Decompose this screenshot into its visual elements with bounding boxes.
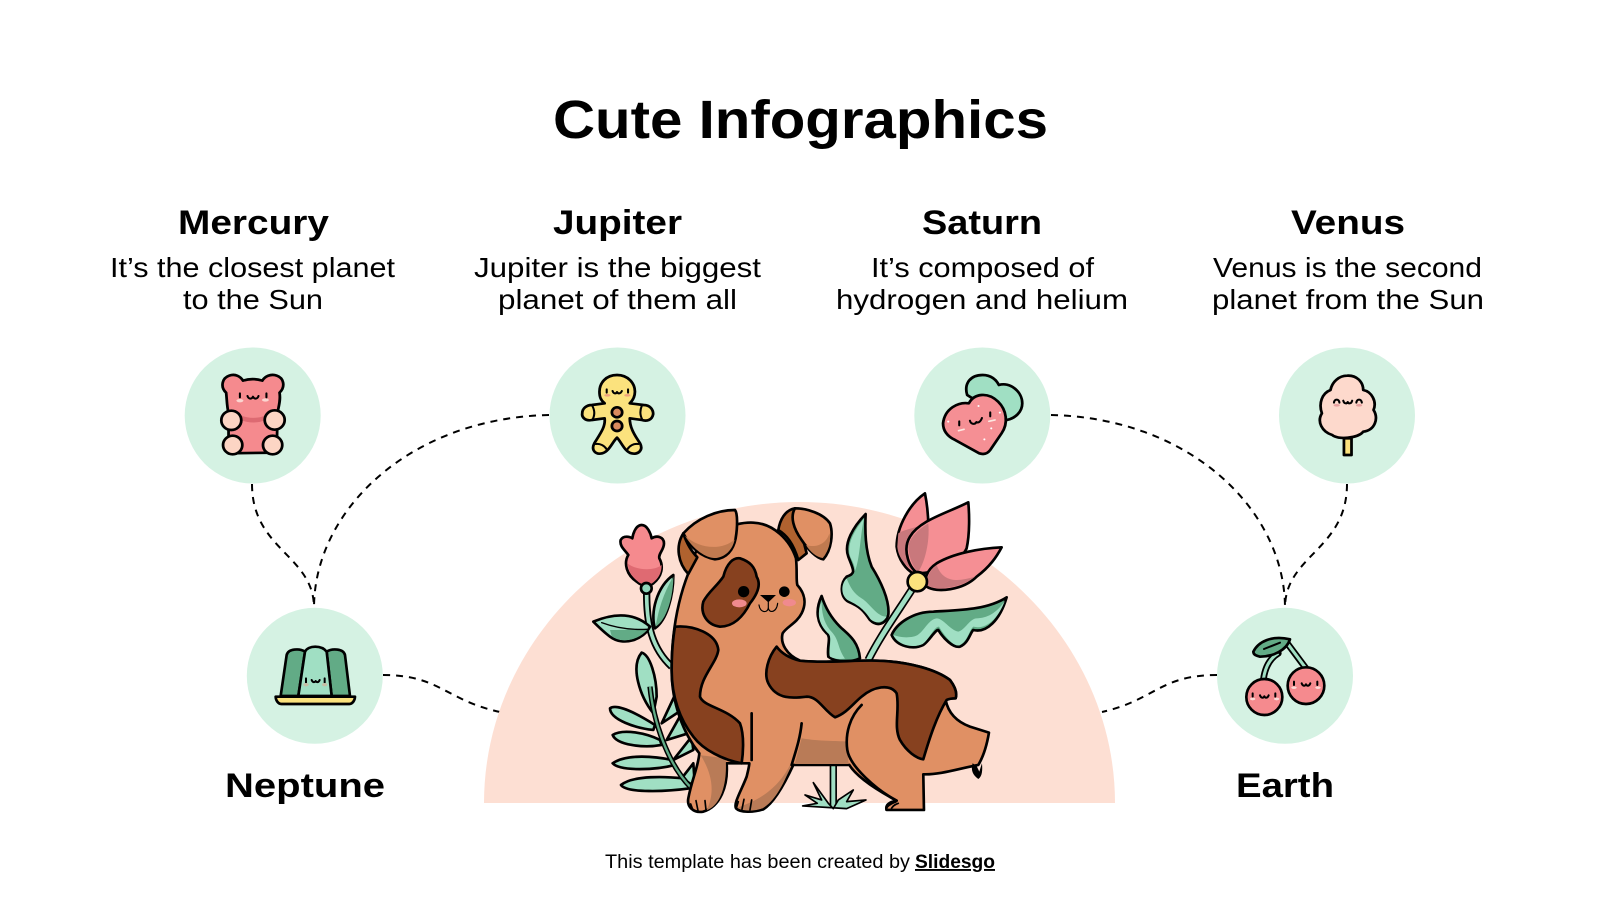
illustration: dog with plants xyxy=(593,493,1007,812)
text block: Jupiter: planet of them all xyxy=(498,284,737,315)
label: Neptune: Neptune xyxy=(225,767,385,805)
label: Earth: Earth xyxy=(1236,767,1334,805)
text block: Jupiter xyxy=(474,204,761,315)
peach semicircle xyxy=(484,502,1115,803)
icon circle: Saturn xyxy=(914,348,1050,484)
text block: Mercury: Mercury xyxy=(178,204,329,242)
plant: left fern xyxy=(610,653,695,791)
icon circle: Mercury xyxy=(185,348,321,484)
icon: jelly xyxy=(276,647,355,704)
icon circle: Venus xyxy=(1279,348,1415,484)
icon circle: Earth xyxy=(1217,608,1353,744)
text block: Saturn: It’s composed of xyxy=(871,252,1094,283)
footer credit: Slidesgo xyxy=(915,852,995,873)
plant: leaves and tulip xyxy=(818,493,1007,661)
title: Cute Infographics xyxy=(553,90,1048,150)
text block: Venus: Venus xyxy=(1291,204,1405,242)
text block: Jupiter: Jupiter is the biggest xyxy=(474,252,761,283)
icon: cherries xyxy=(1246,638,1324,715)
dog xyxy=(672,508,989,812)
text block: Mercury: It’s the closest planet xyxy=(110,252,395,283)
icon: gummy bear xyxy=(221,375,285,454)
text block: Saturn: hydrogen and helium xyxy=(836,284,1128,315)
icon: gingerbread man xyxy=(582,375,653,454)
plant: grass xyxy=(803,763,866,809)
text block: Mercury: to the Sun xyxy=(183,284,323,315)
text block: Venus: planet from the Sun xyxy=(1212,284,1484,315)
text block: Venus: Venus is the second xyxy=(1213,252,1482,283)
text block: Venus xyxy=(1212,204,1484,315)
icon circle: Neptune xyxy=(247,608,383,744)
plant: left flower xyxy=(593,525,673,667)
icon circle: Jupiter xyxy=(550,348,686,484)
dashed connectors xyxy=(252,415,1347,712)
text block: Saturn: Saturn xyxy=(922,204,1042,242)
icon: heart candies xyxy=(943,375,1022,454)
text block: Mercury xyxy=(110,204,395,315)
footer credit: This template has been created by xyxy=(605,852,911,873)
icon: cotton candy xyxy=(1320,376,1376,455)
text block: Saturn xyxy=(836,204,1128,315)
text block: Jupiter: Jupiter xyxy=(553,204,682,242)
